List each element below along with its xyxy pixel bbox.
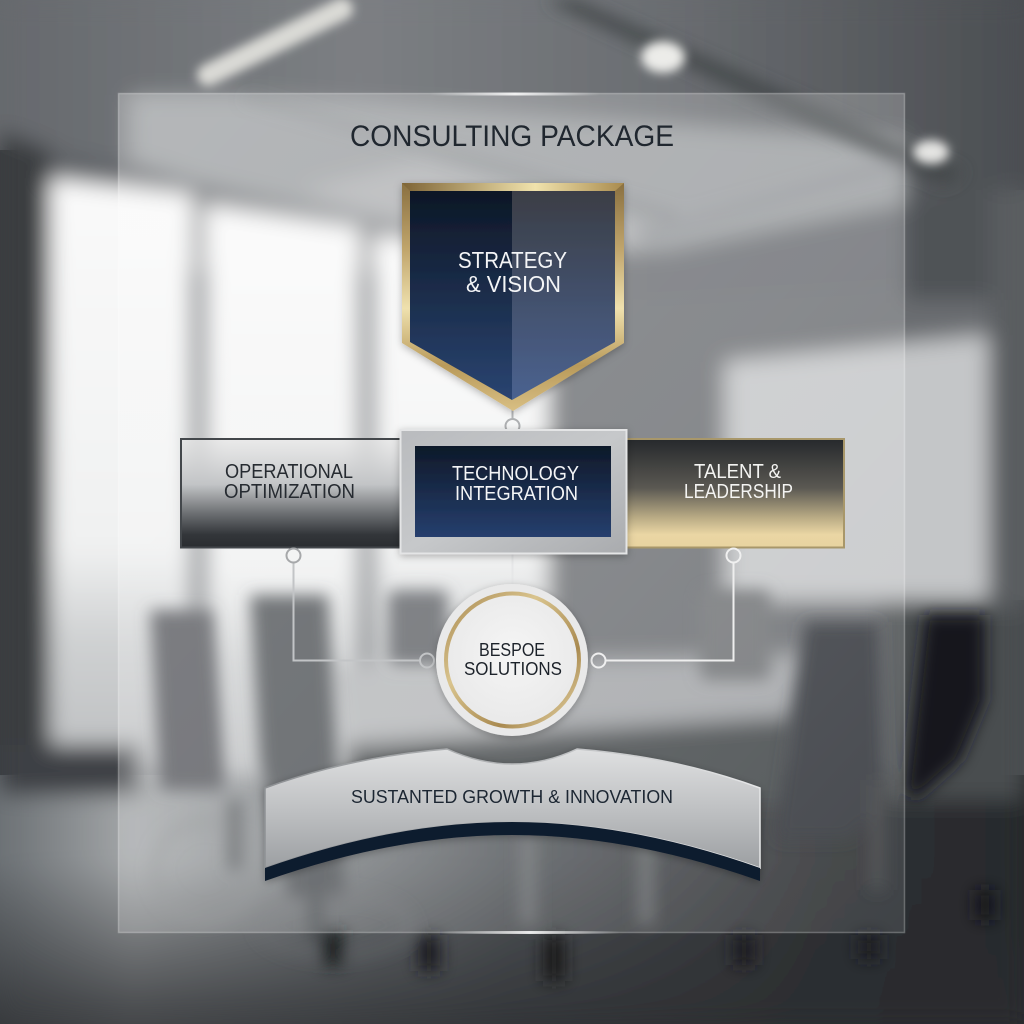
vision label: & VISION [466, 271, 561, 297]
circle: bespoke solutions [436, 584, 588, 736]
connector lines [294, 405, 734, 660]
technology label: TECHNOLOGY [452, 463, 579, 485]
box: talent and leadership [625, 439, 844, 548]
optimization label: OPTIMIZATION [224, 481, 355, 503]
title: CONSULTING PACKAGE [350, 120, 674, 153]
talent label: TALENT & [694, 461, 782, 483]
bespoe label: BESPOE [479, 640, 545, 660]
strategy label: STRATEGY [458, 247, 567, 273]
leadership label: LEADERSHIP [684, 481, 793, 503]
integration label: INTEGRATION [455, 483, 578, 505]
solutions label: SOLUTIONS [464, 659, 562, 679]
connector node: top [506, 419, 520, 433]
banner: sustained growth and innovation [265, 749, 760, 881]
shield: strategy and vision [402, 183, 624, 411]
box: operational optimization [181, 439, 402, 548]
banner label: SUSTANTED GROWTH & INNOVATION [351, 786, 673, 807]
box: technology integration [400, 430, 626, 554]
operational label: OPERATIONAL [225, 461, 353, 483]
glass panel [118, 92, 904, 934]
connector nodes: branches [286, 548, 740, 668]
